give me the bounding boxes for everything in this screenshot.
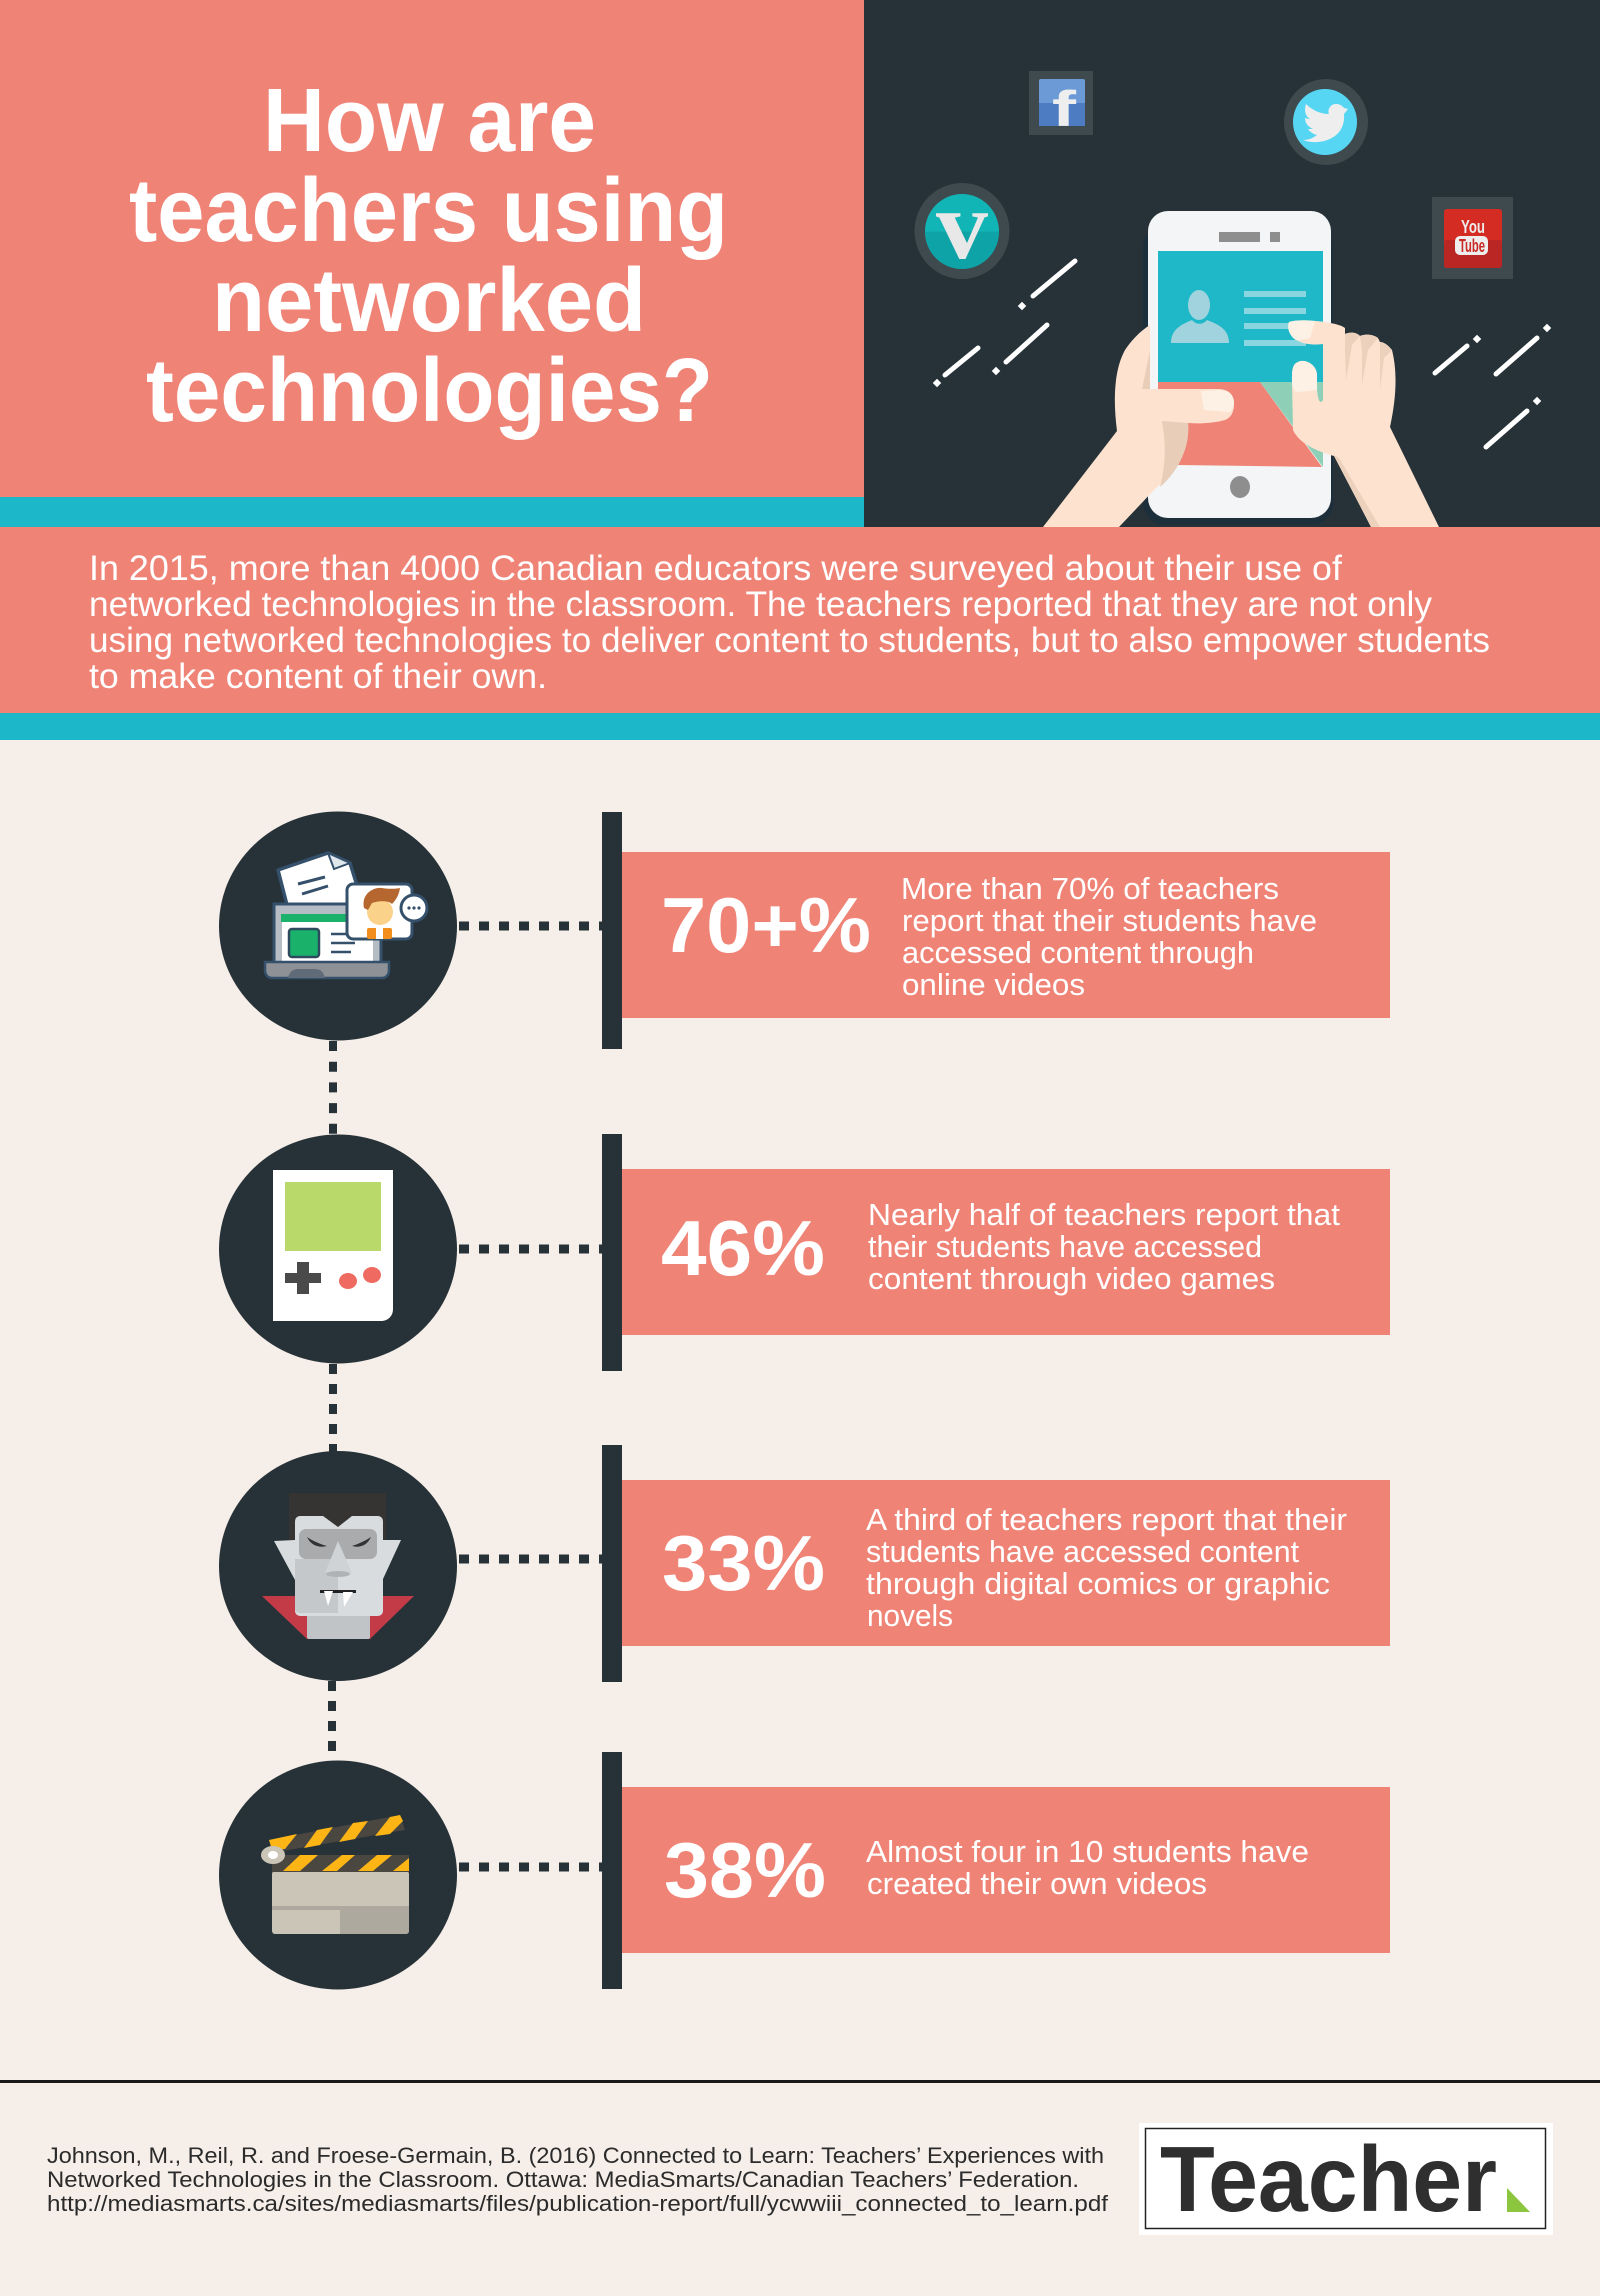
icon: youtube [1432,197,1513,279]
title [129,71,728,441]
panel: stat row 70+% [219,812,1390,1049]
icon: right hand [1288,320,1439,527]
vertical bar [602,1134,622,1371]
vertical bar [602,1752,622,1989]
text block: their students have accessed [868,1229,1262,1264]
stat number: 38% [664,1826,826,1914]
text block: citation [47,2143,1109,2216]
text block: intro paragraph: to make content of their own. [89,657,547,696]
icon: youtube: Tube [1459,236,1485,256]
text block: students have accessed content [866,1534,1299,1569]
text block: accessed content through [902,935,1254,970]
panel: stat row 46% [219,1134,1390,1371]
text block [901,871,1317,1002]
icon circle: film clapperboard [219,1760,457,1990]
panel: stat row 33% [219,1445,1390,1682]
connector [459,1554,610,1564]
text block: online videos [902,967,1085,1002]
title: networked [212,251,646,351]
stat panel [622,1480,1390,1646]
text block [868,1197,1340,1296]
connector [459,1244,610,1254]
title: How are [263,71,596,171]
icon: smartphone [1143,211,1333,525]
vertical bar [602,1445,622,1682]
title: teachers using [129,161,728,261]
stat panel [622,1787,1390,1953]
text block [866,1834,1309,1901]
text block [866,1502,1347,1633]
icon: facebook [1029,71,1093,137]
text block: created their own videos [867,1866,1207,1901]
text block: intro paragraph: networked technologies in the classroom. The teachers reported that they are not only [89,585,1432,624]
connector [459,922,610,930]
stat panel [622,852,1390,1018]
panel: stat row 38% [219,1752,1390,1990]
icon: youtube: You [1461,217,1485,237]
title: technologies? [146,341,713,441]
text block: Almost four in 10 students have [866,1834,1309,1869]
text block: A third of teachers report that their [866,1502,1347,1537]
stat number: 33% [662,1519,825,1607]
text block: citation: http://mediasmarts.ca/sites/mediasmarts/files/publication-report/full/ycwwiii_connected_to_learn.pdf [47,2191,1109,2216]
text block: content through video games [868,1261,1275,1296]
text block: citation: Johnson, M., Reil, R. and Froese-Germain, B. (2016) Connected to Learn: Teachers’ Experiences with [47,2143,1104,2168]
text block: More than 70% of teachers [901,871,1279,906]
icon: motion dashes [933,261,1551,447]
icon: vimeo [914,172,1010,280]
connector [459,1862,610,1872]
footer rule [0,2080,1600,2083]
icon circle: online video laptop [219,812,457,1040]
text block: Nearly half of teachers report that [868,1197,1340,1232]
panel: phone and social media illustration [864,0,1600,527]
icon: twitter [1284,79,1368,165]
text block: report that their students have [902,903,1317,938]
text block: intro paragraph: using networked technologies to deliver content to students, but to also empower students [89,621,1490,660]
panel: introduction [0,527,1600,740]
text block: through digital comics or graphic [866,1566,1330,1601]
icon: vimeo: v [936,172,988,280]
text block: intro paragraph [89,549,1490,696]
text block: intro paragraph: In 2015, more than 4000 Canadian educators were surveyed about their use of [89,549,1342,588]
text block: novels [867,1598,953,1633]
stat number: 70+% [661,881,871,969]
icon: facebook: f [1052,81,1076,137]
icon: left hand [1043,325,1234,527]
panel: title header [0,0,864,527]
stat number: 46% [661,1204,825,1292]
vertical bar [602,812,622,1049]
icon circle: vampire comic character [219,1451,457,1681]
connector: vertical dotted lines [332,1041,333,1751]
logo: Teacher: Teacher [1160,2127,1497,2231]
stat panel [622,1169,1390,1335]
text block: citation: Networked Technologies in the Classroom. Ottawa: MediaSmarts/Canadian Teachers’ Federation. [47,2167,1079,2192]
icon circle: handheld video game [219,1134,457,1364]
